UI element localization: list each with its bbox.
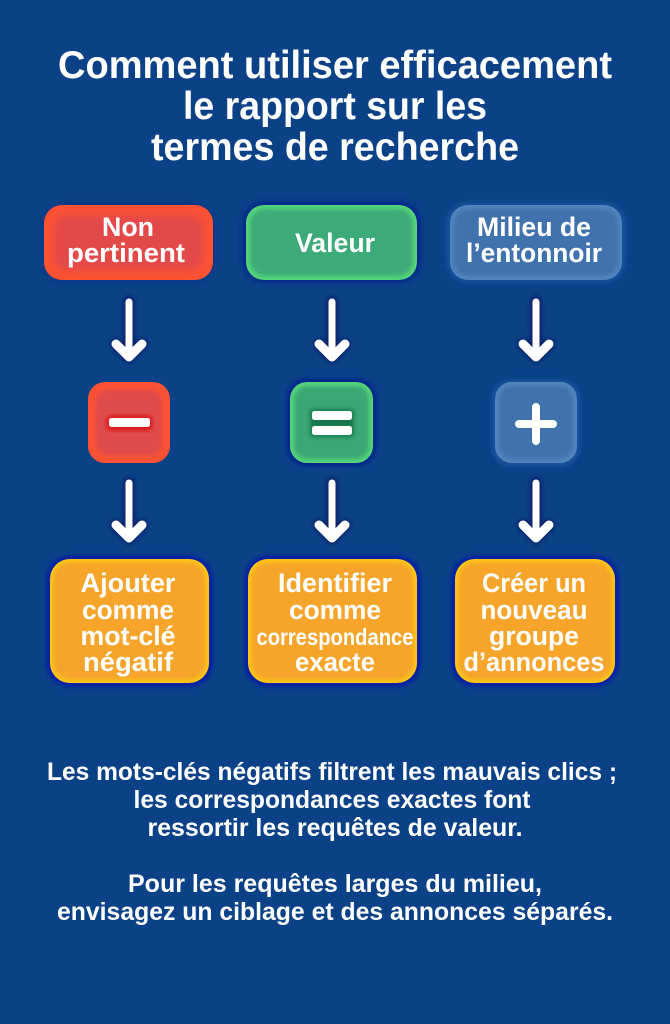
category box: Milieu de l'entonnoir (447, 203, 625, 282)
action box: Identifier comme correspondance exacte: Identifier (278, 568, 392, 598)
category box: Valeur: Valeur (295, 228, 375, 258)
text block: broad mid-funnel queries: envisagez un ciblage et des annonces séparés. (57, 898, 613, 926)
text block: negative keywords and exact matches: ressortir les requêtes de valeur. (148, 814, 522, 842)
title: termes de recherche (151, 126, 519, 169)
text block: broad mid-funnel queries (57, 870, 613, 926)
action box: Ajouter comme mot-clé négatif: mot-clé (80, 621, 176, 651)
icon: equals (287, 379, 376, 466)
title: Comment utiliser efficacement (58, 44, 612, 87)
action box: Créer un nouveau groupe d'annonces: Créer un (482, 568, 586, 598)
action box: Créer un nouveau groupe d'annonces: d’annonces (464, 647, 604, 677)
action box: Ajouter comme mot-clé négatif (47, 556, 212, 686)
action box: Ajouter comme mot-clé négatif: négatif (83, 647, 174, 677)
action box: Ajouter comme mot-clé négatif: Ajouter (80, 568, 176, 598)
title: le rapport sur les (183, 85, 487, 128)
arrow: minus to Ajouter (116, 483, 142, 538)
arrow: Non pertinent to minus (116, 302, 142, 357)
category box: Valeur (243, 202, 420, 282)
arrow: Milieu to plus (523, 302, 549, 357)
action box: Créer un nouveau groupe d'annonces (452, 556, 618, 686)
text block: negative keywords and exact matches (47, 758, 617, 842)
action box: Identifier comme correspondance exacte (245, 556, 420, 686)
category box: Milieu de l'entonnoir: l’entonnoir (466, 238, 602, 268)
icon: plus (492, 380, 580, 466)
action box: Identifier comme correspondance exacte: exacte (295, 647, 375, 677)
category box: Milieu de l'entonnoir: Milieu de (477, 212, 591, 242)
text block: broad mid-funnel queries: Pour les requêtes larges du milieu, (128, 870, 542, 898)
action box: Identifier comme correspondance exacte: comme (289, 595, 381, 625)
title (58, 44, 612, 169)
arrow: plus to Créer (523, 483, 549, 538)
text block: negative keywords and exact matches: Les mots-clés négatifs filtrent les mauvais clics ; (47, 758, 617, 786)
category box: Non pertinent: pertinent (67, 238, 185, 268)
action box: Identifier comme correspondance exacte: correspondance (256, 624, 414, 650)
action box: Créer un nouveau groupe d'annonces: groupe (489, 621, 579, 651)
arrow: equals to Identifier (319, 483, 345, 538)
action box: Créer un nouveau groupe d'annonces: nouveau (480, 595, 588, 625)
action box: Ajouter comme mot-clé négatif: comme (82, 595, 174, 625)
category box: Non pertinent: Non (102, 212, 154, 242)
text block: negative keywords and exact matches: les correspondances exactes font (134, 786, 531, 814)
arrow: Valeur to equals (319, 302, 345, 357)
icon: minus (88, 382, 170, 463)
category box: Non pertinent (43, 204, 214, 281)
